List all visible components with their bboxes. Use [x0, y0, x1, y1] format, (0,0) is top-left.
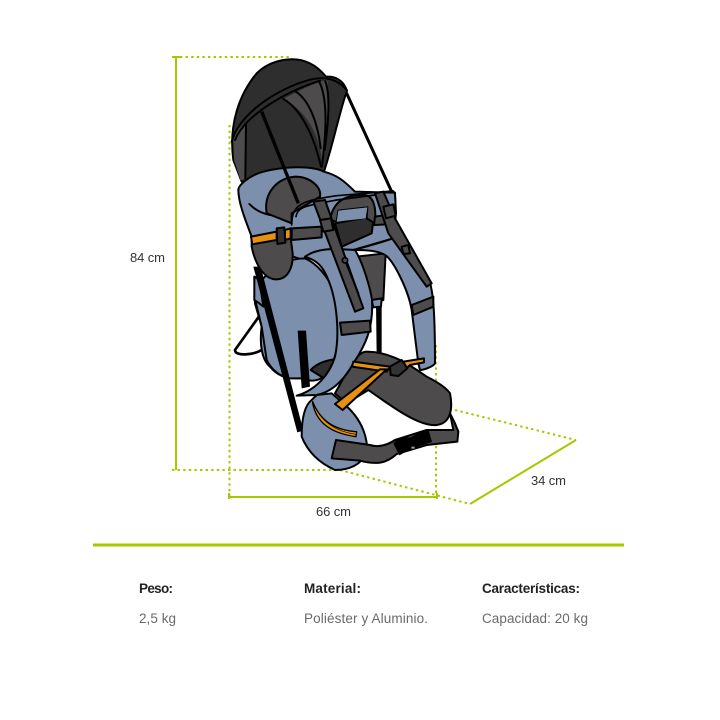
spec: Peso: 2,5 kg [139, 611, 176, 626]
dimension guides [130, 57, 576, 519]
spec: Material: Material: [304, 581, 361, 596]
depth dimension: 34 cm: 34 cm [531, 473, 566, 488]
panel: right shoulder strap [353, 192, 435, 370]
icon: side pad with orange strap [251, 227, 293, 279]
icon: sun canopy [232, 59, 347, 182]
illustration: child carrier backpack [232, 59, 458, 470]
green divider rule [93, 544, 624, 546]
icon: orange hip straps [335, 358, 424, 410]
height dimension: 84 cm: 84 cm [130, 250, 165, 265]
width dimension: 66 cm [229, 125, 437, 519]
icon: support struts [235, 93, 392, 355]
spec: Características [482, 581, 588, 626]
panel: padded front strap [297, 200, 372, 396]
panel: left side strap rod [253, 267, 310, 432]
icon: hip belt pad [311, 352, 451, 425]
height dimension: 84 cm [130, 57, 292, 470]
width dimension: 66 cm: 66 cm [316, 504, 351, 519]
panel: lower back body [254, 258, 339, 381]
icon: headrest [266, 177, 320, 223]
depth dimension: 34 cm [172, 410, 576, 504]
icon: canopy pole [262, 112, 298, 203]
panel: chest pad [292, 191, 396, 247]
panel: carrier back [238, 167, 396, 378]
spec: Características: Capacidad: 20 kg [482, 611, 588, 626]
spec: Características: Características: [482, 581, 580, 596]
icon: waist belt and buckle [332, 413, 458, 463]
spec: Peso [139, 581, 176, 626]
icon: hip cushion with orange trim [302, 393, 367, 470]
spec: Material: Poliéster y Aluminio. [304, 611, 428, 626]
spec: Material [304, 581, 428, 626]
spec: Peso: Peso: [139, 581, 173, 596]
